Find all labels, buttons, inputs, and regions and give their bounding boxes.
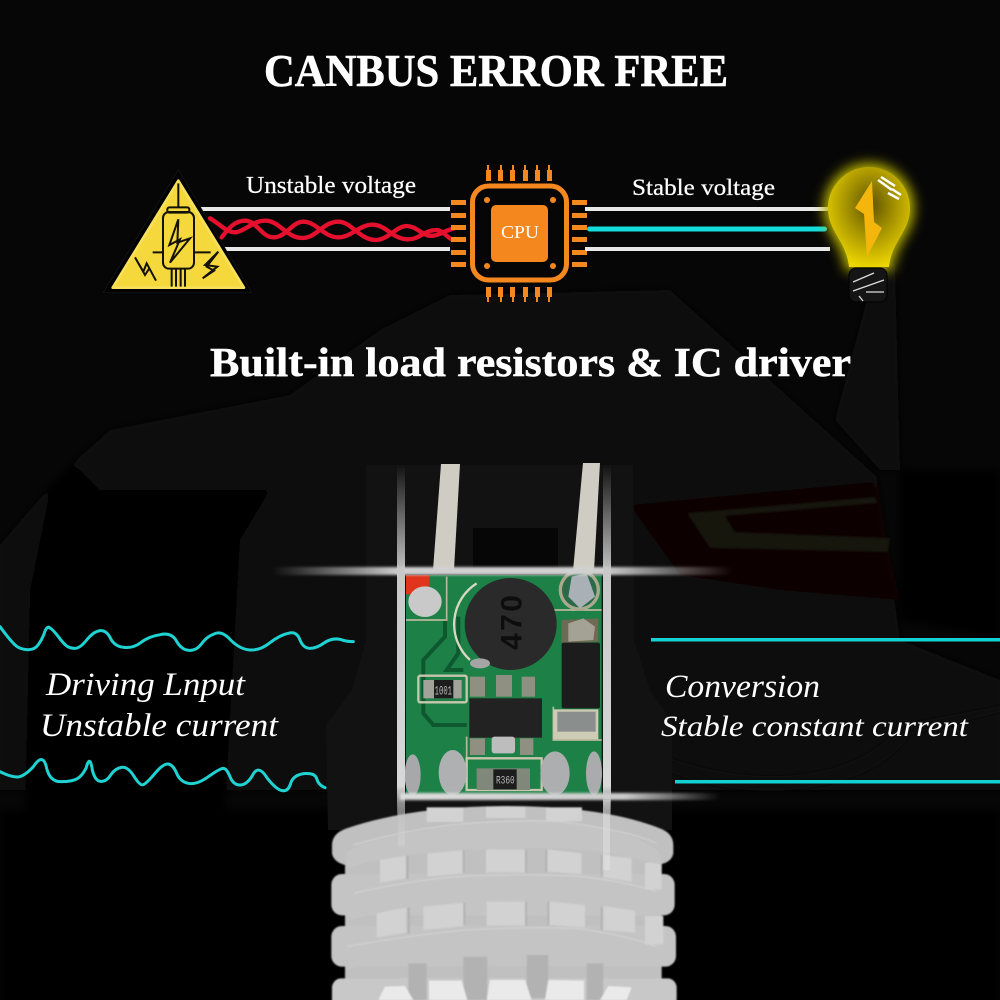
wires into CPU: unstable side: [200, 207, 450, 251]
label: stable voltage: Stable voltage: [632, 175, 775, 200]
vertical glare over lens: [398, 800, 610, 870]
left wave: unstable current bottom: [0, 760, 325, 791]
product: LED lens base: [331, 806, 677, 1000]
subheading: Built-in load resistors & IC driver: [210, 339, 851, 385]
product: dark plastic housing: [326, 465, 672, 830]
title: CANBUS ERROR FREE: [264, 46, 728, 96]
left label: driving input: Driving Lnput: [45, 667, 246, 703]
right lines: stable current: [651, 638, 1000, 784]
right label: stable constant current: Stable constant current: [661, 710, 969, 743]
red twisted unstable voltage wire: [210, 218, 453, 240]
icon: glowing light bulb: [828, 167, 910, 302]
left wave: unstable current top: [0, 627, 353, 650]
circuit board with components: R360: [496, 775, 515, 787]
metal contact pins: [433, 463, 600, 571]
CPU label: CPU: [501, 222, 539, 242]
icon: CPU chip: [451, 165, 587, 302]
left label: unstable current: Unstable current: [40, 708, 279, 744]
icon: warning triangle with capacitor: [103, 170, 252, 293]
label: unstable voltage: Unstable voltage: [246, 173, 416, 199]
circuit board with components: 1001: [435, 683, 452, 698]
right label: conversion: Conversion: [665, 669, 820, 705]
circuit board with components: [405, 569, 602, 797]
stable voltage wires: [585, 207, 830, 251]
light glare streaks: [272, 465, 732, 830]
circuit board with components: 470: [496, 595, 529, 650]
dark recess in housing: [473, 528, 558, 568]
